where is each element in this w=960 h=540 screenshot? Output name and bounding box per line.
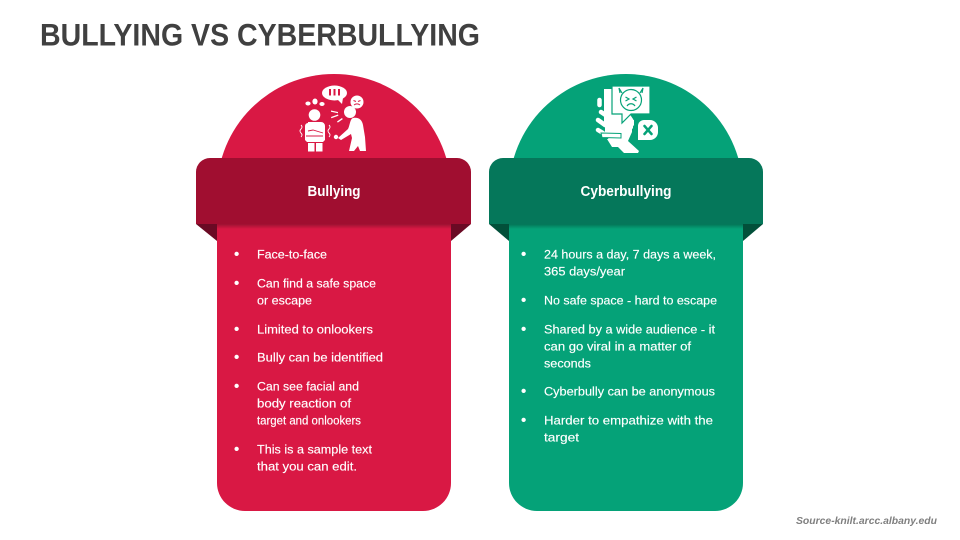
ribbon fold right: bullying xyxy=(451,224,471,241)
bullet list: bullying: Bully can be identified xyxy=(257,350,383,364)
bullet list: cyberbullying: • xyxy=(521,383,526,400)
ribbon fold left: bullying xyxy=(196,224,217,241)
icon: bully shouting at target xyxy=(300,86,366,152)
ribbon fold left: cyberbullying xyxy=(489,224,509,241)
bullet list: bullying: that you can edit. xyxy=(257,460,357,474)
bullet list: cyberbullying: • xyxy=(521,412,526,429)
ribbon fold right: cyberbullying xyxy=(743,224,763,241)
bullet list: cyberbullying xyxy=(521,246,717,444)
bullet list: bullying: target and onlookers xyxy=(257,414,361,428)
bullet list: bullying: This is a sample text xyxy=(257,442,373,456)
source note: Source-knilt.arcc.albany.edu xyxy=(796,515,938,527)
bullet list: bullying: Can find a safe space xyxy=(257,276,376,290)
bullet list: cyberbullying: target xyxy=(544,430,580,444)
bullet list: cyberbullying: can go viral in a matter of xyxy=(544,340,692,354)
bullet list: bullying xyxy=(234,246,383,474)
semicircle top: bullying xyxy=(217,74,451,308)
heading: bullying: Bullying xyxy=(308,184,360,200)
icon: phone with angry message xyxy=(598,86,658,153)
panel: cyberbullying xyxy=(489,74,763,511)
bullet list: bullying: • xyxy=(234,441,239,458)
header band: cyberbullying xyxy=(489,158,763,224)
bullet list: bullying: or escape xyxy=(257,294,312,308)
bullet list: cyberbullying: Shared by a wide audience - it xyxy=(544,322,716,336)
bullet list: bullying: • xyxy=(234,349,239,366)
bullet list: cyberbullying: • xyxy=(521,246,526,263)
semicircle top: cyberbullying xyxy=(509,74,743,308)
panel body: cyberbullying xyxy=(509,200,743,511)
header band: bullying xyxy=(196,158,471,224)
bullet list: cyberbullying: Cyberbully can be anonymous xyxy=(544,384,715,398)
bullet list: cyberbullying: • xyxy=(521,292,526,309)
bullet list: bullying: Can see facial and xyxy=(257,380,359,394)
bullet list: cyberbullying: No safe space - hard to escape xyxy=(544,294,717,308)
bullet list: bullying: body reaction of xyxy=(257,396,352,410)
bullet list: cyberbullying: • xyxy=(521,321,526,338)
title: BULLYING VS CYBERBULLYING xyxy=(40,16,480,52)
bullet list: cyberbullying: 24 hours a day, 7 days a week, xyxy=(544,248,716,262)
bullet list: cyberbullying: seconds xyxy=(544,356,591,370)
bullet list: bullying: Limited to onlookers xyxy=(257,322,373,336)
bullet list: bullying: • xyxy=(234,321,239,338)
bullet list: bullying: Face-to-face xyxy=(257,248,327,262)
heading: cyberbullying: Cyberbullying xyxy=(580,184,672,200)
panel body: bullying xyxy=(217,200,451,511)
bullet list: cyberbullying: Harder to empathize with the xyxy=(544,414,713,428)
panel: bullying xyxy=(196,74,471,511)
bullet list: bullying: • xyxy=(234,246,239,263)
bullet list: bullying: • xyxy=(234,378,239,395)
bullet list: cyberbullying: 365 days/year xyxy=(544,264,625,278)
bullet list: bullying: • xyxy=(234,275,239,292)
